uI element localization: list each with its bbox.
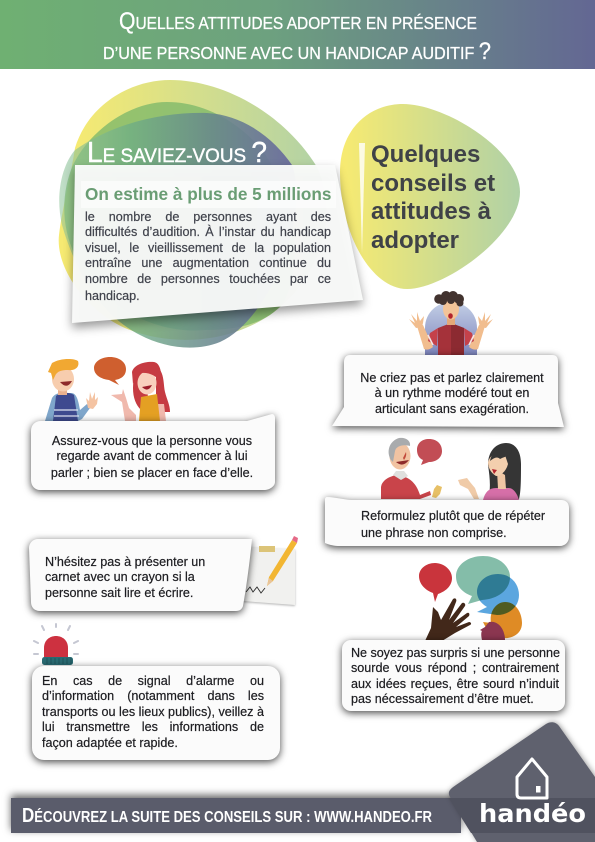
estimate headline: On estime à plus de 5 millions (85, 184, 331, 204)
card: n'hesitez pas: carnet avec un crayon si la (45, 570, 195, 584)
card: ne soyez pas surpris: pas nécessairement d’être muet. (351, 692, 534, 706)
head (447, 316, 455, 325)
body text: nombre de personnes touchées par ce (85, 272, 331, 286)
panel: quelques conseils (340, 104, 520, 289)
hair (434, 291, 464, 306)
man (45, 393, 90, 421)
card: ne criez pas (328, 350, 569, 436)
body text: le nombre de personnes ayant des (85, 210, 331, 224)
man (381, 475, 431, 499)
speech bubble (417, 439, 442, 465)
logo: handeo: handéo (479, 799, 586, 828)
torso (438, 323, 464, 356)
pale heading band (81, 181, 336, 208)
body text (85, 210, 331, 303)
woman (458, 478, 479, 499)
card: n'hesitez pas: N’hésitez pas à présenter un (45, 555, 205, 569)
card: signal d'alarme: transports ou les lieux publics), veillez à (42, 705, 264, 719)
body text: entraîne une augmentation continue du (85, 256, 331, 270)
illustration: older man and woman talking (381, 438, 521, 500)
card: ne criez pas: à un rythme modéré tout en (375, 386, 529, 400)
card: signal d'alarme: d’information (notamment dans les (42, 689, 264, 703)
card: signal d'alarme: façon adaptée et rapide. (42, 736, 178, 750)
footer bar (5, 789, 466, 836)
header banner (0, 0, 595, 69)
le saviez-vous heading: LE SAVIEZ-VOUS ? (87, 137, 267, 169)
illustration: speech bubbles and hand (419, 556, 522, 640)
speech bubble (94, 357, 126, 385)
illustration: young couple talking (45, 357, 170, 421)
panel: le saviez-vous (58, 80, 368, 348)
woman (133, 366, 170, 412)
illustration: note and pencil (244, 536, 298, 607)
card: assurez-vous: regarde avant de commencer à lui (56, 449, 248, 463)
green blob (64, 102, 295, 330)
card: assurez-vous: parler ; bien se placer en face d’elle. (51, 466, 253, 480)
card: assurez-vous: Assurez-vous que la personne vous (52, 434, 252, 448)
body text: difficultés d’audition. À l’instar du handicap (85, 225, 331, 239)
yellow blob (59, 80, 326, 340)
body text: visuel, le vieillissement de la population (85, 241, 331, 255)
logo: handeo (446, 719, 595, 842)
card: signal d'alarme (26, 662, 286, 768)
conseils heading: Quelques (371, 141, 480, 168)
conseils heading: conseils et (371, 170, 495, 197)
white note panel (72, 165, 363, 323)
icon: alarm beacon (33, 623, 79, 665)
card: ne criez pas: articulant sans exagération. (375, 402, 529, 416)
conseils heading: attitudes à (371, 198, 491, 225)
purple blob (59, 113, 296, 348)
footer link text: DÉCOUVREZ LA SUITE DES CONSEILS SUR : WWW.HANDEO.FR (22, 805, 432, 827)
arms (417, 325, 485, 350)
conseils heading (371, 141, 495, 254)
body text: handicap. (85, 289, 140, 303)
card: reformulez: une phrase non comprise. (361, 526, 507, 540)
house icon (517, 759, 547, 798)
card: ne soyez pas surpris: Ne soyez pas surpris si une personne (351, 646, 560, 660)
card: n'hesitez pas: personne sait lire et écrire. (45, 586, 193, 600)
conseils heading: adopter (371, 227, 459, 254)
card: n'hesitez pas (23, 534, 258, 620)
title: D’UNE PERSONNE AVEC UN HANDICAP AUDITIF ? (103, 38, 491, 65)
card: signal d'alarme: En cas de signal d’alarme ou (42, 674, 264, 688)
illustration: surprised man (409, 291, 493, 355)
card: ne criez pas: Ne criez pas et parlez clairement (360, 371, 544, 385)
card: ne soyez pas surpris: sourde vous répond ; contrairement (351, 661, 559, 675)
card: ne soyez pas surpris (336, 636, 572, 720)
title: QUELLES ATTITUDES ADOPTER EN PRÉSENCE (119, 8, 477, 35)
card: reformulez (318, 493, 576, 554)
card: assurez-vous (24, 410, 282, 498)
card: signal d'alarme: lui transmettre les informations de (42, 720, 264, 734)
card: ne soyez pas surpris: aux idées reçues, être sourd n’induit (351, 677, 559, 691)
title (103, 8, 491, 65)
card: reformulez: Reformulez plutôt que de répéter (361, 509, 545, 523)
